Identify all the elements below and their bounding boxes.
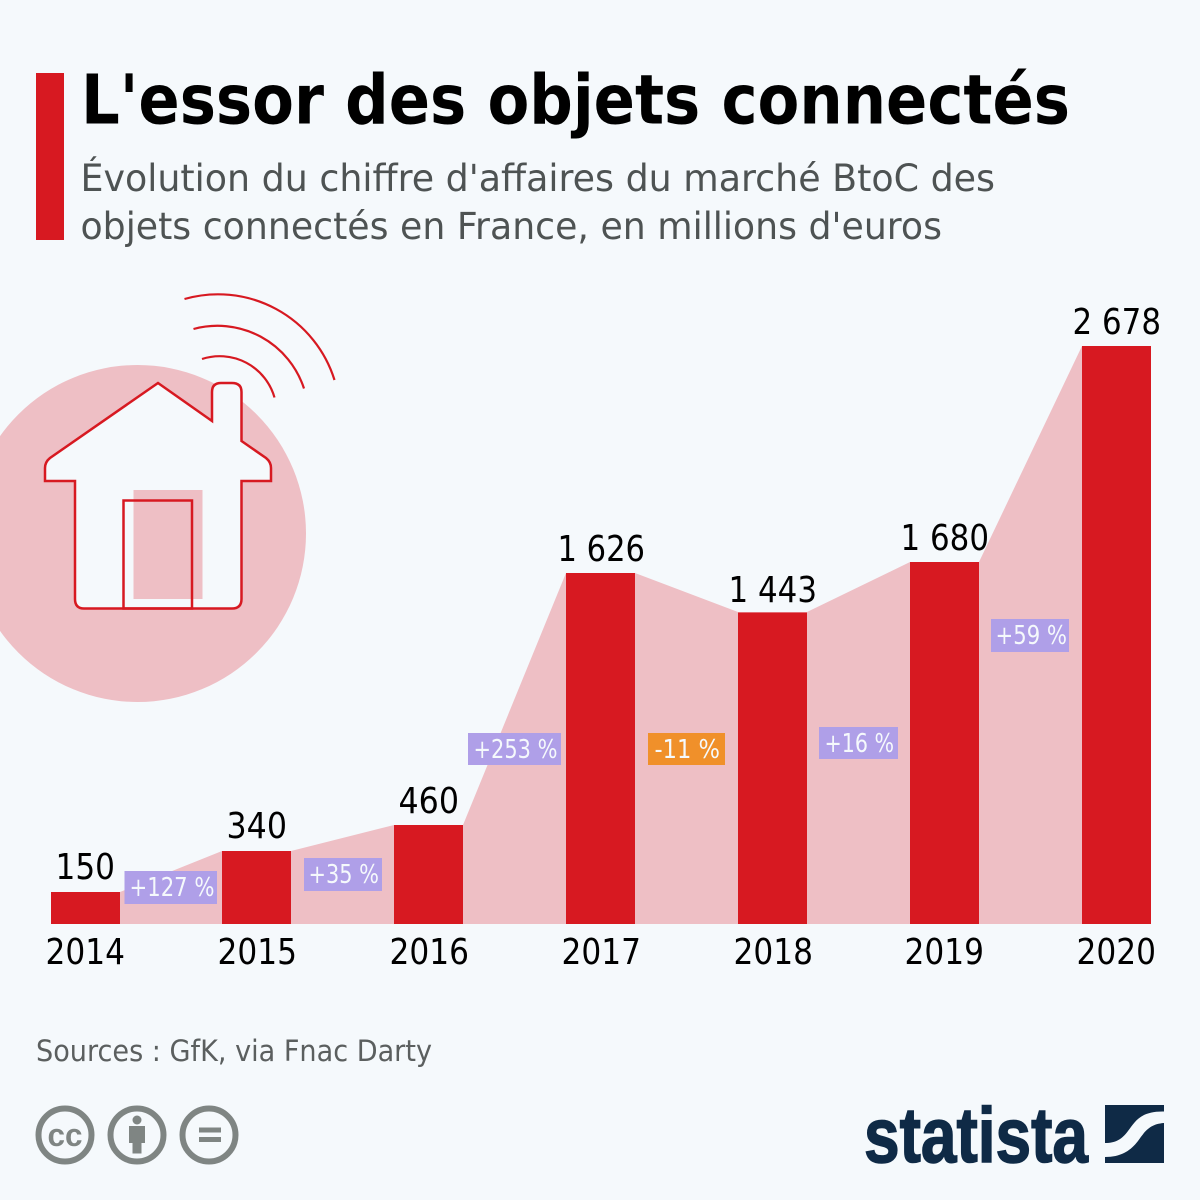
icon: attribution [110,1108,164,1162]
bar value labels: 1 626 [558,529,645,570]
change badge: +35 %: +35 % [308,860,379,890]
icon: door shadow [134,490,202,599]
year axis labels: 2015 [218,932,297,973]
subtitle [80,156,995,248]
change badge: +59 %: +59 % [996,621,1067,651]
statista wordmark: statista [864,1091,1088,1179]
subtitle: Évolution du chiffre d'affaires du marché BtoC des [80,156,995,200]
bar value labels: 460 [398,781,459,822]
year axis labels: 2018 [734,932,813,973]
icon: door outline [124,500,192,608]
icon: creative commons [38,1108,92,1162]
year axis labels: 2017 [562,932,641,973]
year axis labels [46,932,1156,973]
area chart background [51,346,1151,924]
year axis labels: 2020 [1076,932,1156,973]
change badge: +127 %: +127 % [130,873,214,903]
statista logo mark [1105,1105,1164,1163]
icon: no derivatives [182,1108,236,1162]
bar value labels [56,302,1161,888]
year axis labels: 2019 [904,932,984,973]
change badge: -11 %: -11 % [654,735,720,765]
source note: Sources : GfK, via Fnac Darty [36,1034,432,1068]
title accent bar [36,73,64,240]
bar value labels: 2 678 [1072,302,1161,343]
icon: background circle [0,365,306,702]
icon: wifi waves [184,294,334,398]
icon: house outline [45,383,271,608]
change badge: +253 %: +253 % [474,735,558,765]
bar value labels: 150 [56,847,115,888]
bar value labels: 1 680 [900,518,989,559]
subtitle: objets connectés en France, en millions d'euros [80,204,942,248]
icon: creative commons: cc [48,1117,82,1153]
year axis labels: 2014 [46,932,125,973]
bar value labels: 1 443 [728,570,817,611]
year axis labels: 2016 [390,932,469,973]
icon: connected house [0,294,334,702]
bar value labels: 340 [226,806,287,847]
title: L'essor des objets connectés [81,60,1070,140]
bar chart [51,346,1151,924]
change badge: +16 %: +16 % [824,729,894,759]
